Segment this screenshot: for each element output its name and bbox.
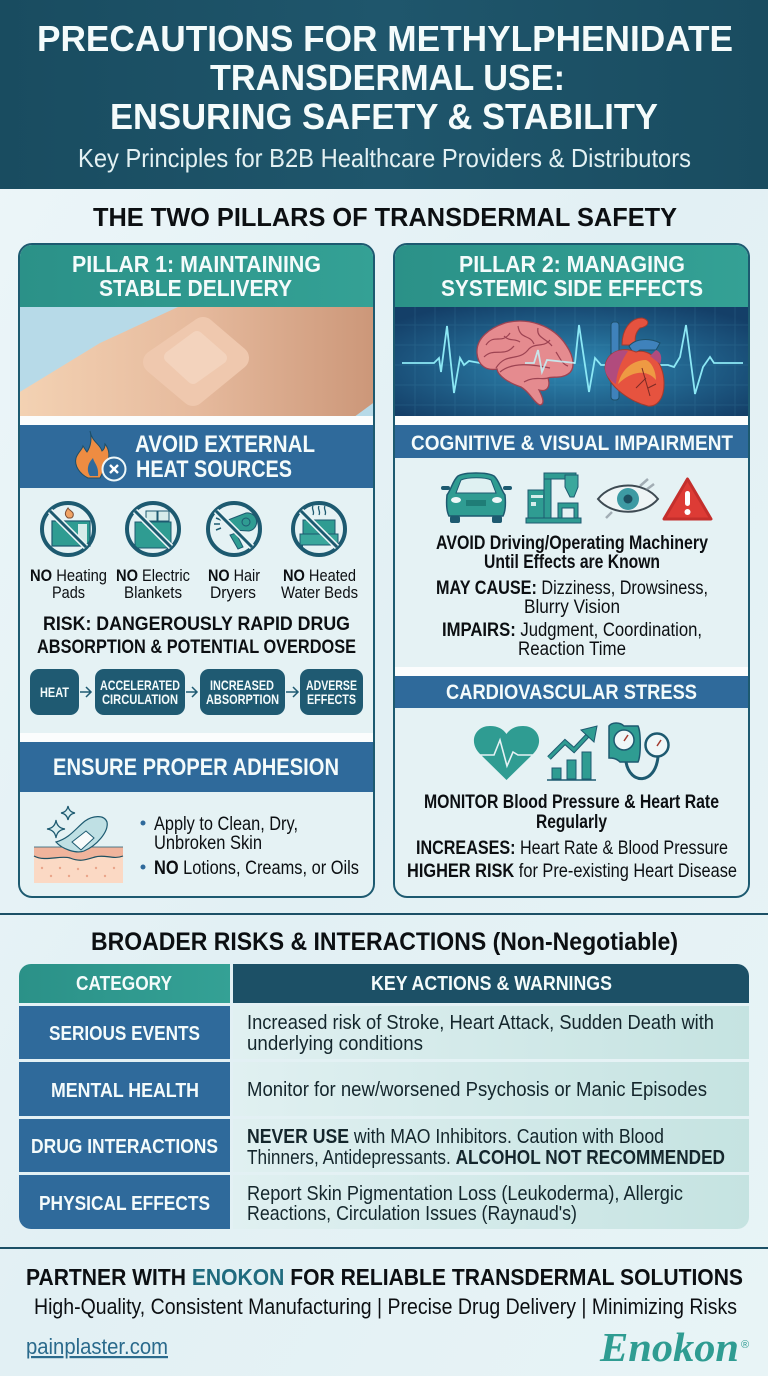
- title: TRANSDERMAL USE:: [210, 57, 565, 98]
- row: physical effects: Reactions, Circulation Issues (Raynaud's): [247, 1203, 577, 1225]
- sub-heading: cardiovascular stress: [395, 676, 748, 708]
- flow: heat to adverse effects: CIRCULATION: [102, 691, 178, 707]
- cognitive warnings: Reaction Time: [518, 639, 626, 660]
- panel: pillar 2: [394, 244, 749, 897]
- cardiovascular warnings: [407, 792, 737, 882]
- cognitive warnings: IMPAIRS: Judgment, Coordination,: [442, 620, 702, 641]
- icon labels: Dryers: [210, 583, 256, 602]
- logo: Enokon: ®: [741, 1339, 749, 1351]
- adhesion bullet list: Apply to Clean, Dry,: [154, 814, 298, 835]
- risk statement: [37, 614, 356, 658]
- cardiovascular warnings: HIGHER RISK for Pre-existing Heart Disease: [407, 861, 737, 882]
- footer call to action: [26, 1264, 743, 1319]
- flow: heat to adverse effects: ACCELERATED: [100, 677, 180, 693]
- sub-heading: ensure proper adhesion: [20, 742, 373, 792]
- adhesion bullet list: NO Lotions, Creams, or Oils: [154, 858, 359, 879]
- table header: KEY ACTIONS & WARNINGS: [371, 973, 612, 995]
- title: [37, 18, 733, 137]
- pillar 1 heading: STABLE DELIVERY: [99, 275, 292, 301]
- cardiovascular warnings: MONITOR Blood Pressure & Heart Rate: [424, 792, 719, 813]
- row: serious events: SERIOUS EVENTS: [49, 1023, 200, 1045]
- pillar 2 heading: SYSTEMIC SIDE EFFECTS: [441, 275, 703, 301]
- flow: heat to adverse effects: INCREASED: [210, 677, 274, 693]
- sub-heading: avoid external heat sources: HEAT SOURCES: [136, 456, 292, 483]
- illustration: brain, heart and ECG: [395, 307, 748, 416]
- icon: no heating pads: [42, 503, 94, 555]
- sub-heading: cognitive and visual impairment: COGNITIVE & VISUAL IMPAIRMENT: [411, 432, 733, 455]
- row: serious events: Increased risk of Stroke, Heart Attack, Sudden Death with: [247, 1012, 714, 1034]
- row: drug interactions: Thinners, Antidepressants. ALCOHOL NOT RECOMMENDED: [247, 1147, 725, 1169]
- icon: patch applied to skin: [34, 806, 123, 883]
- icon: rising chart: [547, 726, 597, 780]
- sub-heading: avoid external heat sources: [20, 425, 373, 488]
- row: drug interactions: DRUG INTERACTIONS: [31, 1136, 218, 1158]
- table header: CATEGORY: [76, 973, 173, 995]
- icon labels: NO Heating: [30, 566, 107, 585]
- adhesion bullet list: [140, 814, 359, 879]
- pillar 2 heading: PILLAR 2: MANAGING: [459, 251, 685, 277]
- pillar 2 heading: [395, 245, 748, 307]
- icon: warning triangle: [664, 479, 711, 519]
- row: mental health: MENTAL HEALTH: [51, 1080, 199, 1102]
- pillar 1 heading: [20, 245, 373, 307]
- row: mental health: [51, 1079, 707, 1102]
- icon labels: Water Beds: [281, 583, 358, 602]
- header banner: [0, 0, 768, 189]
- icon: no heated water beds: [293, 503, 345, 555]
- icon labels: Pads: [52, 583, 85, 602]
- row: drug interactions: NEVER USE with MAO Inhibitors. Caution with Blood: [247, 1126, 664, 1148]
- icon labels: NO Heated: [283, 566, 356, 585]
- flow: heat to adverse effects: EFFECTS: [307, 691, 356, 707]
- cognitive warnings: Blurry Vision: [524, 597, 620, 618]
- icon: blurred eye: [598, 479, 658, 518]
- cognitive warnings: AVOID Driving/Operating Machinery: [436, 533, 708, 554]
- logo: Enokon: Enokon: [599, 1324, 739, 1370]
- sub-heading: ensure proper adhesion: ENSURE PROPER ADHESION: [53, 754, 339, 781]
- row: physical effects: [39, 1183, 683, 1225]
- adhesion bullet list: Unbroken Skin: [154, 833, 262, 854]
- website link: painplaster.com: [26, 1334, 168, 1359]
- icon labels: [30, 566, 358, 602]
- cognitive warnings: [436, 533, 708, 660]
- icon: car: [443, 473, 510, 523]
- subtitle: Key Principles for B2B Healthcare Providers & Distributors: [78, 143, 691, 173]
- row: physical effects: Report Skin Pigmentation Loss (Leukoderma), Allergic: [247, 1183, 683, 1205]
- table header: [76, 973, 612, 995]
- risk statement: RISK: DANGEROUSLY RAPID DRUG: [43, 614, 350, 635]
- title: PRECAUTIONS FOR METHYLPHENIDATE: [37, 18, 733, 59]
- cardiovascular warnings: INCREASES: Heart Rate & Blood Pressure: [416, 838, 728, 859]
- row: physical effects: PHYSICAL EFFECTS: [39, 1193, 210, 1215]
- row: drug interactions: [31, 1126, 725, 1169]
- icon labels: NO Electric: [116, 566, 190, 585]
- icon: machinery: [526, 473, 581, 523]
- brain: [477, 321, 573, 405]
- panel: pillar 1: [10, 244, 380, 897]
- section heading: broader risks: BROADER RISKS & INTERACTIONS (Non-Negotiable): [91, 928, 678, 956]
- icon: heart with pulse: [474, 726, 539, 780]
- flow: heat to adverse effects: ADVERSE: [306, 677, 357, 693]
- risk statement: ABSORPTION & POTENTIAL OVERDOSE: [37, 637, 356, 658]
- row: mental health: Monitor for new/worsened Psychosis or Manic Episodes: [247, 1079, 707, 1101]
- heart: [605, 318, 664, 406]
- sub-heading: cardiovascular stress: CARDIOVASCULAR STRESS: [446, 681, 697, 704]
- row: serious events: underlying conditions: [247, 1033, 423, 1055]
- icon labels: Blankets: [124, 583, 182, 602]
- pillar 1 heading: PILLAR 1: MAINTAINING: [72, 251, 321, 277]
- cognitive warnings: MAY CAUSE: Dizziness, Drowsiness,: [436, 578, 708, 599]
- icon labels: NO Hair: [208, 566, 260, 585]
- icon: no electric blankets: [127, 503, 179, 555]
- cardiovascular warnings: Regularly: [536, 812, 607, 833]
- cognitive warnings: Until Effects are Known: [484, 552, 660, 573]
- flow: heat to adverse effects: ABSORPTION: [206, 691, 279, 707]
- sub-heading: cognitive and visual impairment: [395, 425, 748, 458]
- icon: no hair dryers: [208, 503, 260, 555]
- flow: heat to adverse effects: HEAT: [40, 684, 69, 700]
- icon: blood pressure cuff: [609, 723, 668, 779]
- icon: flame with x: [76, 431, 126, 480]
- sub-heading: avoid external heat sources: AVOID EXTERNAL: [135, 431, 315, 458]
- footer call to action: PARTNER WITH ENOKON FOR RELIABLE TRANSDERMAL SOLUTIONS: [26, 1264, 743, 1290]
- table: risks and interactions: [19, 964, 749, 1229]
- row: serious events: [49, 1012, 714, 1055]
- flow: heat to adverse effects: [30, 669, 363, 715]
- title: ENSURING SAFETY & STABILITY: [110, 96, 658, 137]
- photo: patch on arm: [10, 307, 380, 420]
- section heading: two pillars: THE TWO PILLARS OF TRANSDERMAL SAFETY: [93, 202, 677, 232]
